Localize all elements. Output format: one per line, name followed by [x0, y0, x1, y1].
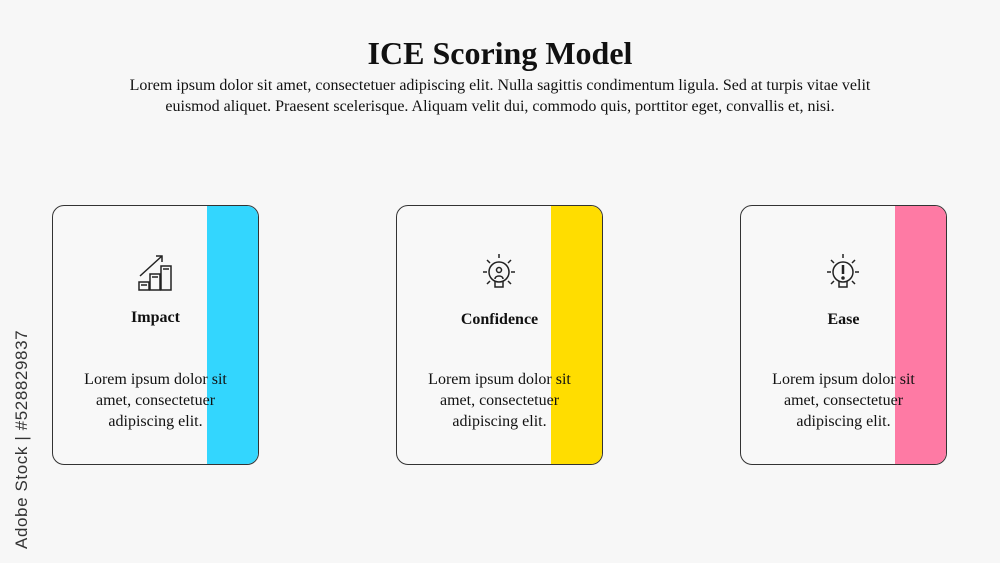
text: confidence: [428, 371, 571, 430]
text: confidence: Lorem ipsum dolor sit: [428, 371, 571, 388]
panel: impact: [52, 205, 259, 465]
text: impact: [84, 371, 227, 430]
panel: confidence: [396, 205, 603, 465]
text: ease: [772, 371, 915, 430]
side watermark text: Adobe Stock | #528829837: [12, 330, 31, 549]
text: confidence: adipiscing elit.: [452, 413, 547, 430]
intro text: Lorem ipsum dolor sit amet, consectetuer adipiscing elit. Nulla sagittis condimentum ligula. Sed at turpis vitae velit euismod aliquet. Praesent scelerisque. Aliquam velit dui, commodo quis, porttitor eget, convallis et, nisi.: [130, 77, 870, 115]
text: impact: adipiscing elit.: [108, 413, 203, 430]
heading: ease: Ease: [828, 311, 860, 328]
heading: impact: Impact: [131, 309, 180, 326]
panel: ease: [740, 205, 947, 465]
text: ease: adipiscing elit.: [796, 413, 891, 430]
text: ease: Lorem ipsum dolor sit: [772, 371, 915, 388]
icon: bulb person: [483, 254, 515, 288]
text: confidence: amet, consectetuer: [440, 392, 559, 409]
heading: confidence: Confidence: [461, 311, 538, 328]
text: impact: amet, consectetuer: [96, 392, 215, 409]
title: ICE Scoring Model: [368, 35, 632, 71]
icon: chart: [138, 255, 172, 291]
text: ease: amet, consectetuer: [784, 392, 903, 409]
text: impact: Lorem ipsum dolor sit: [84, 371, 227, 388]
icon: bulb exclamation: [827, 254, 859, 288]
